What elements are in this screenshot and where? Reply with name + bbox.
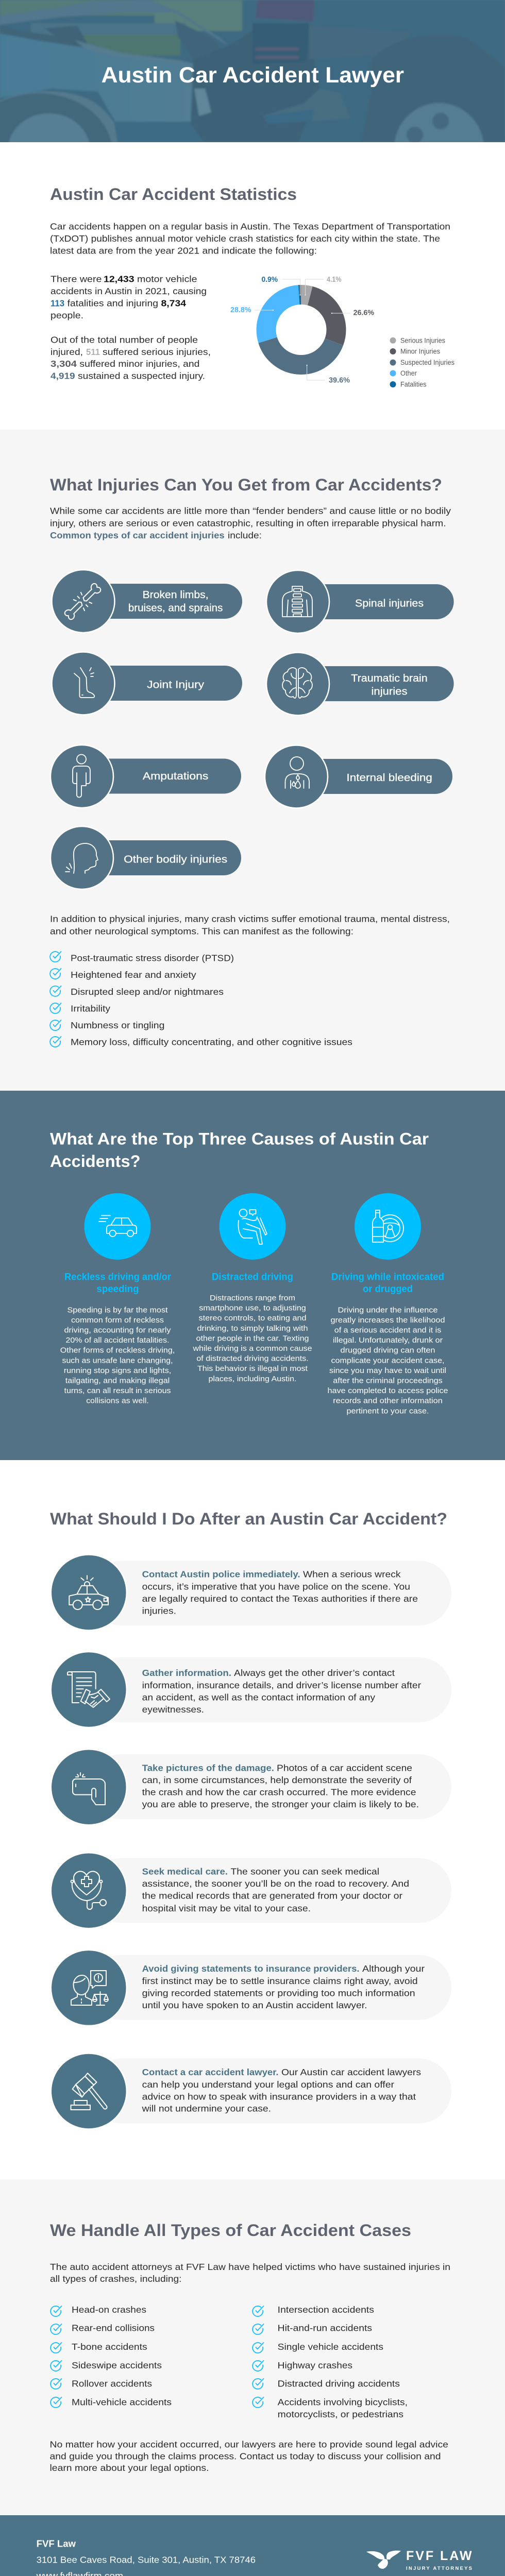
step: avoid statements <box>51 1950 451 2026</box>
step: take pictures <box>51 1749 451 1825</box>
text block: distracted driving: Distractions range from <box>210 1294 295 1302</box>
text block: distracted driving: smartphone use, to adjusting <box>199 1304 306 1313</box>
text block: statistics intro <box>50 221 450 256</box>
pill: broken limbs <box>52 570 242 633</box>
cause: reckless driving: Reckless driving and/or <box>64 1271 171 1282</box>
text block: contact a lawyer: Our Austin car accident lawyers <box>281 2067 421 2077</box>
donut chart: 4.1% <box>327 276 342 284</box>
text block: statistics intro: (TxDOT) publishes annual motor vehicle crash statistics for each city within the state. The <box>50 233 440 244</box>
text block: seek medical care <box>142 1866 409 1913</box>
cause: driving while intoxicated: Driving while intoxicated <box>331 1271 444 1282</box>
text block: statistics intro: Car accidents happen on a regular basis in Austin. The Texas Department of Transportation <box>50 221 450 231</box>
text block: driving while intoxicated: after the criminal proceedings <box>333 1377 443 1385</box>
icon: man with speech bubble and scales <box>71 1971 108 2005</box>
icon: knee joint <box>74 668 94 698</box>
text block: distracted driving: drinking, to simply talking with <box>197 1324 308 1333</box>
text block: closing <box>49 2439 448 2473</box>
checklist: right column: Intersection accidents <box>278 2304 374 2315</box>
cause: distracted driving: Distracted driving <box>212 1271 293 1282</box>
text block: driving while intoxicated: since you may have to wait until <box>329 1366 446 1375</box>
text block: emotional injuries intro: and other neurological symptoms. This can manifest as the following: <box>50 926 354 936</box>
pill: traumatic brain injuries <box>266 652 454 715</box>
text block: injury breakdown <box>50 334 211 381</box>
pill: internal bleeding: Internal bleeding <box>346 772 432 784</box>
text block: injury breakdown: Out of the total number of people <box>50 334 198 345</box>
checklist: symptoms: Heightened fear and anxiety <box>71 970 196 980</box>
text block: distracted driving: This behavior is illegal in most <box>197 1364 308 1373</box>
text block: reckless driving: 20% of all accident fatalities. <box>66 1336 169 1345</box>
text block: contact a lawyer: will not undermine your case. <box>141 2104 271 2114</box>
text block: injury breakdown: sustained a suspected injury. <box>78 371 205 381</box>
icon: bone <box>62 581 104 622</box>
text block: statistics intro: latest data are from the year 2021 and indicate the following: <box>50 245 317 256</box>
footer <box>0 2515 505 2576</box>
checklist: left column <box>50 2304 172 2408</box>
icon: hand holding phone <box>73 1773 105 1805</box>
pill: amputations: Amputations <box>143 770 208 782</box>
text block: reckless driving: common form of reckless <box>71 1316 164 1325</box>
pill: joint injury: Joint Injury <box>147 679 205 691</box>
text block: contact police: When a serious wreck <box>303 1569 401 1580</box>
text block: contact a lawyer: can help you understand your legal options and can offer <box>142 2079 394 2090</box>
step: seek medical care <box>51 1853 451 1928</box>
donut chart <box>230 276 374 384</box>
heading: statistics: Austin Car Accident Statistics <box>50 185 297 204</box>
text block: contact police: are legally required to contact the Texas authorities if there are <box>142 1594 418 1604</box>
text block: injury breakdown: 511 <box>86 347 100 357</box>
text block: driving while intoxicated: complicate your accident case, <box>331 1356 444 1365</box>
text block: driving while intoxicated: drugged driving can often <box>340 1346 435 1355</box>
hero banner <box>0 0 505 142</box>
checklist: right column: motorcyclists, or pedestrians <box>278 2409 403 2419</box>
text block: gather information: Always get the other driver’s contact <box>234 1668 395 1678</box>
text block: avoid statements: Avoid giving statements to insurance providers. <box>142 1963 360 1974</box>
checklist: left column: Rear-end collisions <box>72 2323 155 2333</box>
text block: avoid statements: first instinct may be to settle insurance claims right away, avoid <box>142 1976 418 1986</box>
heading: causes: Accidents? <box>50 1152 140 1171</box>
text block: driving while intoxicated: Driving under the influence <box>338 1306 438 1314</box>
checklist: left column: Rollover accidents <box>72 2379 152 2389</box>
text block: driving while intoxicated: have completed to access police <box>328 1386 448 1395</box>
step: contact a lawyer <box>51 2054 451 2129</box>
text block: reckless driving: tailgating, and making illegal <box>65 1377 170 1385</box>
pill: joint injury <box>52 652 242 715</box>
cause: reckless driving: speeding <box>97 1283 139 1295</box>
text block: gather information <box>142 1668 421 1715</box>
panel: causes <box>0 1091 505 1460</box>
text block: case types intro: The auto accident attorneys at FVF Law have helped victims who have sustained injuries in <box>50 2262 450 2272</box>
text block: injury breakdown: injured, <box>50 347 83 357</box>
checklist: symptoms: Memory loss, difficulty concentrating, and other cognitive issues <box>71 1037 352 1047</box>
text block: contact a lawyer: advice on how to speak with insurance providers in a way that <box>142 2091 416 2102</box>
text block: injuries intro: Common types of car accident injuries <box>50 530 225 540</box>
pill: other bodily injuries <box>50 826 241 889</box>
hero photo: crashed cars <box>0 0 505 142</box>
text block: accident totals <box>50 274 207 320</box>
icon: speeding car <box>99 1215 137 1236</box>
text block: injuries intro <box>50 505 451 540</box>
chart legend: Serious Injuries <box>400 336 445 344</box>
checklist: symptoms: Irritability <box>71 1003 110 1013</box>
text block: seek medical care: The sooner you can seek medical <box>231 1866 379 1876</box>
text block: accident totals: 8,734 <box>161 298 186 308</box>
pill: internal bleeding <box>265 745 452 808</box>
footer contact details: 3101 Bee Caves Road, Suite 301, Austin, TX 78746 <box>37 2555 256 2565</box>
text block: injury breakdown: suffered minor injuries, and <box>79 359 199 369</box>
checklist: symptoms: Post-traumatic stress disorder (PTSD) <box>71 953 234 963</box>
text block: contact police <box>142 1569 418 1616</box>
heading: injuries: What Injuries Can You Get from Car Accidents? <box>50 476 442 494</box>
text block: injury breakdown: suffered serious injuries, <box>103 347 211 357</box>
title: Austin Car Accident Lawyer <box>101 63 404 88</box>
text block: seek medical care: hospital visit may be vital to your case. <box>142 1903 311 1913</box>
panel: what to do after an accident <box>0 1460 505 2179</box>
checklist: left column: T-bone accidents <box>72 2342 147 2352</box>
text block: avoid statements: Although your <box>362 1963 425 1974</box>
text block: reckless driving: Speeding is by far the most <box>67 1306 168 1314</box>
text block: distracted driving: places, including Austin. <box>208 1375 297 1383</box>
icon: brain <box>282 668 312 698</box>
text block: accident totals: accidents in Austin in 2021, causing <box>50 286 207 296</box>
checklist: symptoms <box>50 952 352 1047</box>
text block: driving while intoxicated: records and other information <box>333 1397 443 1405</box>
icon: document and handshake <box>68 1672 110 1707</box>
checklist: right column: Single vehicle accidents <box>278 2342 383 2352</box>
step: gather information <box>51 1652 451 1727</box>
text block: emotional injuries intro <box>50 914 450 936</box>
text block: distracted driving: stereo controls, to eating and <box>199 1314 306 1323</box>
text block: driving while intoxicated: pertinent to your case. <box>346 1406 429 1415</box>
text block: reckless driving: running stop signs and lights, <box>64 1366 171 1375</box>
icon: bottle and steering wheel <box>373 1210 403 1242</box>
icon: police car <box>69 1575 108 1609</box>
logo: FVF Law: INJURY ATTORNEYS <box>406 2566 472 2571</box>
panel: injuries <box>0 430 505 1091</box>
text block: injury breakdown: 3,304 <box>50 359 77 369</box>
text block: accident totals: fatalities and injuring <box>68 298 158 308</box>
text block: avoid statements: until you have spoken to an Austin accident lawyer. <box>142 2000 367 2010</box>
text block: reckless driving: collisions as well. <box>86 1397 149 1405</box>
panel: statistics <box>0 142 505 430</box>
cause: driving while intoxicated: or drugged <box>363 1283 413 1295</box>
pill: amputations <box>50 745 241 808</box>
text block: take pictures: the crash and how the car crash occurred. The more evidence <box>142 1787 416 1797</box>
pill: other bodily injuries: Other bodily injuries <box>124 853 227 866</box>
heading: after accident: What Should I Do After an Austin Car Accident? <box>50 1510 447 1528</box>
donut chart: 0.9% <box>262 276 278 284</box>
chart legend: Fatalities <box>400 381 427 388</box>
text block: contact police: Contact Austin police immediately. <box>142 1569 300 1580</box>
text block: closing: and guide you through the claims process. Contact us today to discuss your collision and <box>49 2451 441 2462</box>
heading: causes: What Are the Top Three Causes of Austin Car <box>50 1129 429 1148</box>
text block: seek medical care: assistance, the sooner you’ll be on the road to recovery. And <box>142 1878 409 1889</box>
donut chart: 26.6% <box>354 309 374 317</box>
pill: broken limbs: Broken limbs, <box>143 589 209 601</box>
text block: accident totals: 12,433 <box>104 274 134 284</box>
chart legend: Other <box>400 369 417 377</box>
text block: driving while intoxicated: illegal. Unfortunately, drunk or <box>333 1336 443 1345</box>
icon: heart and stethoscope <box>71 1871 106 1909</box>
text block: case types intro <box>50 2262 450 2284</box>
text block: injuries intro: While some car accidents are little more than “fender benders” and cause little or no bodily <box>50 505 451 516</box>
text block: contact police: occurs, it’s imperative that you have police on the scene. You <box>142 1581 410 1591</box>
chart legend: Suspected Injuries <box>400 359 454 366</box>
text block: seek medical care: the medical records that are generated from your doctor or <box>142 1891 402 1901</box>
logo: FVF Law: FVF LAW <box>406 2549 472 2563</box>
icon: amputee figure <box>73 754 90 798</box>
text block: accident totals: There were <box>50 274 102 284</box>
pill: traumatic brain injuries: injuries <box>371 685 407 698</box>
text block: gather information: Gather information. <box>142 1668 231 1678</box>
text block: injuries intro: injury, others are serious or even catastrophic, resulting in often irreparable physical harm. <box>50 518 446 528</box>
checklist: left column: Head-on crashes <box>72 2304 146 2315</box>
pill: spinal injuries <box>266 570 454 633</box>
text block: take pictures: Photos of a car accident scene <box>277 1763 412 1773</box>
text block: contact a lawyer: Contact a car accident lawyer. <box>142 2067 279 2077</box>
text block: driving while intoxicated: of a serious accident and it is <box>334 1326 441 1334</box>
icon: gavel <box>71 2073 107 2110</box>
pill: traumatic brain injuries: Traumatic brain <box>351 672 428 684</box>
text block: emotional injuries intro: In addition to physical injuries, many crash victims suffer emotional trauma, mental distress, <box>50 914 450 924</box>
text block: gather information: eyewitnesses. <box>142 1704 204 1715</box>
cause: driving while intoxicated <box>328 1193 448 1415</box>
checklist: right column: Hit-and-run accidents <box>278 2323 372 2333</box>
step: contact police <box>51 1555 451 1630</box>
panel: case types <box>0 2179 505 2515</box>
donut chart: 39.6% <box>329 376 350 384</box>
text block: reckless driving: turns, can all result in serious <box>64 1386 171 1395</box>
text block: gather information: information, insurance details, and driver’s license number after <box>142 1680 421 1690</box>
text block: closing: learn more about your legal options. <box>49 2463 209 2473</box>
text block: take pictures <box>142 1763 419 1809</box>
checklist: symptoms: Disrupted sleep and/or nightmares <box>71 987 224 997</box>
icon: head profile <box>65 843 98 873</box>
pill: spinal injuries: Spinal injuries <box>355 598 424 609</box>
text block: closing: No matter how your accident occurred, our lawyers are here to provide sound legal advice <box>49 2439 448 2449</box>
text block: accident totals: 113 <box>50 298 64 308</box>
text block: driving while intoxicated: greatly increases the likelihood <box>331 1316 445 1325</box>
text block: take pictures: can, in some circumstances, help demonstrate the severity of <box>142 1775 412 1785</box>
text block: accident totals: motor vehicle <box>137 274 197 284</box>
icon: distracted driver <box>238 1209 267 1244</box>
text block: gather information: an accident, as well as the contact information of any <box>142 1692 375 1702</box>
text block: contact a lawyer <box>141 2067 421 2114</box>
checklist: right column <box>252 2304 408 2419</box>
text block: distracted driving: other people in the car. Texting <box>196 1334 309 1343</box>
pill: broken limbs: bruises, and sprains <box>128 602 223 614</box>
text block: driving while intoxicated <box>328 1306 448 1415</box>
footer contact details <box>36 2538 256 2576</box>
text block: injuries intro: include: <box>228 530 262 540</box>
icon: internal bleeding figure <box>285 757 309 788</box>
text block: distracted driving <box>192 1294 312 1383</box>
text block: case types intro: all types of crashes, including: <box>50 2274 181 2284</box>
heading: causes <box>50 1129 429 1171</box>
text block: reckless driving: driving, accounting for nearly <box>64 1326 171 1334</box>
cause: reckless driving <box>60 1193 175 1405</box>
chart legend: Minor Injuries <box>400 348 440 355</box>
text block: seek medical care: Seek medical care. <box>142 1866 228 1876</box>
checklist: left column: Multi-vehicle accidents <box>72 2397 172 2408</box>
text block: reckless driving: Other forms of reckless driving, <box>60 1346 175 1355</box>
text block: reckless driving <box>60 1306 175 1405</box>
footer contact details: FVF Law <box>37 2538 76 2549</box>
text block: contact police: injuries. <box>142 1606 176 1616</box>
logo: FVF Law <box>366 2549 472 2571</box>
checklist: right column: Highway crashes <box>278 2360 352 2370</box>
text block: distracted driving: while driving is a common cause <box>192 1344 312 1353</box>
text block: distracted driving: of distracted driving accidents. <box>196 1354 309 1363</box>
text block: injury breakdown: 4,919 <box>50 371 75 381</box>
icon: spine <box>282 586 312 617</box>
text block: take pictures: Take pictures of the damage. <box>142 1763 274 1773</box>
checklist: right column: Accidents involving bicyclists, <box>278 2397 408 2408</box>
text block: avoid statements <box>142 1963 425 2010</box>
text block: avoid statements: giving recorded statements or providing too much information <box>142 1988 415 1998</box>
donut chart: 28.8% <box>230 306 251 314</box>
text block: reckless driving: such as unsafe lane changing, <box>62 1356 173 1365</box>
checklist: symptoms: Numbness or tingling <box>71 1020 164 1030</box>
checklist: left column: Sideswipe accidents <box>72 2360 162 2370</box>
chart legend <box>390 336 454 388</box>
text block: accident totals: people. <box>50 310 83 320</box>
checklist: right column: Distracted driving accidents <box>278 2379 400 2389</box>
heading: case types: We Handle All Types of Car Accident Cases <box>50 2221 411 2240</box>
text block: take pictures: you are able to preserve, the stronger your claim is likely to be. <box>142 1799 419 1809</box>
cause: distracted driving <box>192 1193 312 1383</box>
